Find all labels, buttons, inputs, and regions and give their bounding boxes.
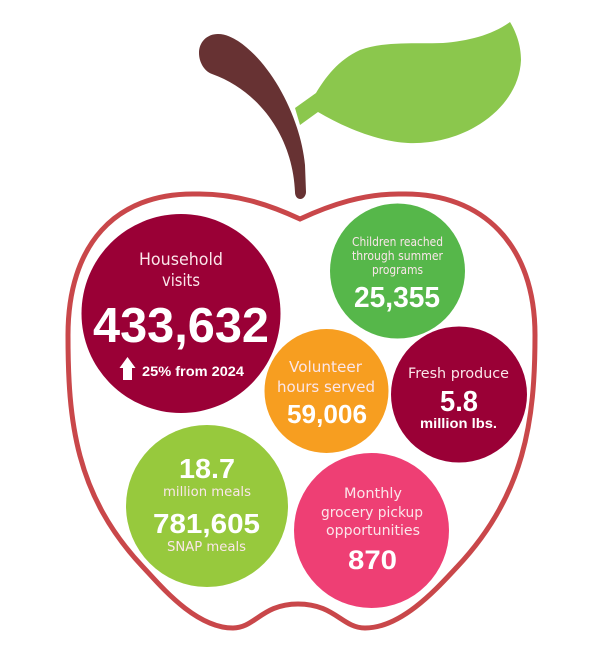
label: million meals: million meals [163, 484, 251, 500]
icon: up arrow [120, 357, 136, 380]
label: volunteer hours: Volunteer [289, 358, 363, 376]
label: volunteer hours: hours served [277, 378, 375, 396]
panel: children reached [330, 204, 465, 338]
number: 59,006: 59,006 [287, 399, 367, 429]
panel: household visits [82, 214, 280, 413]
panel: fresh produce [391, 326, 527, 462]
label: volunteer hours [277, 358, 375, 396]
number: 5.8: 5.8 [440, 386, 478, 418]
label: household visits [139, 250, 223, 290]
number: 781,605: 781,605 [153, 508, 260, 539]
label: children reached: Children reached [352, 235, 443, 249]
label: children reached [352, 235, 443, 277]
number: 25,355: 25,355 [354, 282, 440, 314]
label: children reached: programs [372, 263, 423, 277]
label: children reached: through summer [352, 249, 443, 263]
icon: stem [199, 34, 306, 199]
label: household visits: visits [162, 271, 200, 290]
icon: leaf [295, 22, 521, 143]
apple outline [68, 194, 535, 628]
number: 870: 870 [348, 545, 397, 575]
number: 433,632: 433,632 [93, 299, 269, 353]
change from 2024: 25% from 2024 [142, 364, 245, 379]
unit: million lbs.: million lbs. [420, 416, 497, 431]
panel: meals [126, 425, 288, 587]
label: grocery pickup: Monthly [344, 486, 402, 502]
label: fresh produce: Fresh produce [408, 366, 509, 382]
label: grocery pickup: grocery pickup [321, 505, 423, 521]
label: SNAP meals: SNAP meals [167, 539, 246, 555]
panel: volunteer hours [264, 329, 388, 453]
number: 18.7: 18.7 [179, 453, 235, 484]
label: household visits: Household [139, 250, 223, 269]
panel: grocery pickup [294, 453, 449, 608]
label: grocery pickup: opportunities [326, 523, 420, 539]
label: grocery pickup [321, 486, 423, 539]
